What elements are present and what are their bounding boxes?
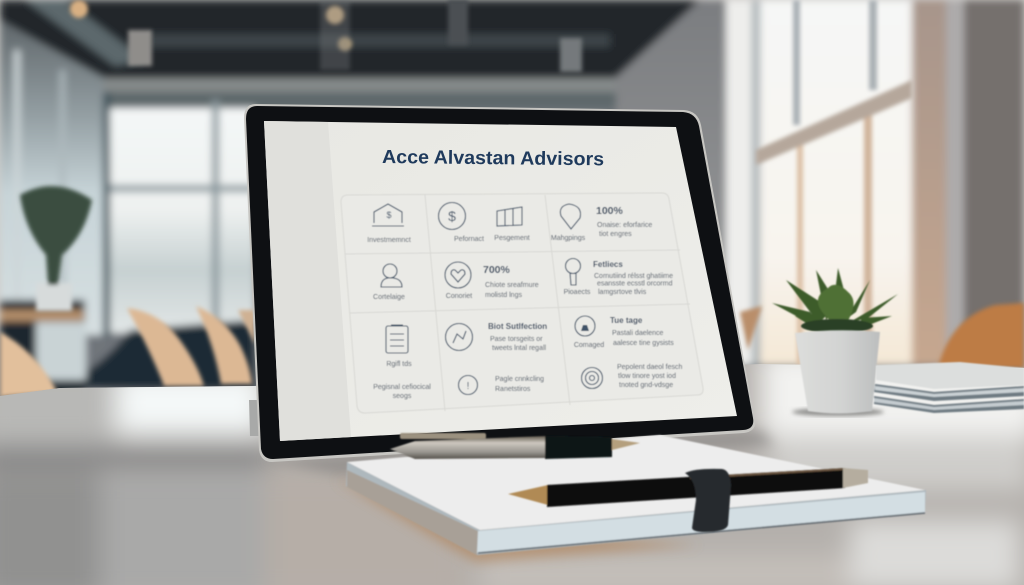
cell: satisfaction <box>446 322 547 352</box>
cell: right bills: Pegisnal cefiocical <box>373 384 431 391</box>
tablet shadow <box>262 430 775 475</box>
pot shadow <box>792 408 884 416</box>
cell: tue tags: Comaged <box>574 342 604 349</box>
tablet bezel <box>246 106 753 459</box>
left wall <box>0 20 104 335</box>
cell: 700% <box>445 262 539 300</box>
feature grid <box>341 193 703 413</box>
right wall <box>616 0 726 365</box>
cell: fetliecs: lamgsrtove tlvis <box>598 289 647 296</box>
cell: 100%: Mahgpings <box>551 235 586 242</box>
notepad warm shadow <box>335 478 700 562</box>
cell: payment <box>438 202 484 243</box>
centre window <box>110 108 255 333</box>
cell: engagement: Pesgement <box>494 235 530 242</box>
cell: fetliecs: Fetliecs <box>593 260 623 269</box>
cell: satisfaction: Biot Sutlfection <box>488 322 547 331</box>
cell: 700%: Conoriet <box>446 293 472 300</box>
heading: Acce Alvastan Advisors <box>382 147 604 170</box>
background: blurred office interior <box>0 0 1024 420</box>
tablet stand <box>249 400 262 436</box>
cell: investment: $ <box>386 210 392 220</box>
cell: right bills <box>373 325 431 400</box>
cell: fetliecs: Pioaects <box>564 289 591 296</box>
cell: 700%: molistd lngs <box>485 292 522 299</box>
cell: fetliecs: esansste ecsstl orcormd <box>597 280 673 288</box>
header band <box>104 78 616 92</box>
silver pen <box>390 433 640 459</box>
cell: investment: Investmemnct <box>367 237 411 244</box>
cell: engagement <box>494 207 530 242</box>
plant in white pot <box>772 268 898 416</box>
cell: notice <box>458 376 544 394</box>
cell: tue tags: aalesce tine gysists <box>613 340 674 347</box>
table lighting <box>0 350 1024 585</box>
cell: 700%: 700% <box>483 264 511 276</box>
ceiling <box>0 0 700 78</box>
left wall panels <box>14 50 20 335</box>
dark furniture <box>55 320 255 390</box>
table top <box>0 364 1024 585</box>
cell: notice: ! <box>467 381 469 392</box>
cell: 700%: Chiote sreafmure <box>485 282 539 289</box>
sidebar <box>264 121 351 441</box>
cell: 100% <box>551 204 652 242</box>
cell: target: tlow tinore yost iod <box>618 373 676 380</box>
cell: tue tags: Tue tage <box>610 316 643 325</box>
pot <box>795 330 880 414</box>
background chairs <box>0 303 1024 397</box>
cell: target: Pepolent daeol fesch <box>617 364 682 371</box>
cell: tue tags <box>574 316 674 349</box>
window mullions <box>756 0 912 365</box>
notepad on table <box>346 435 926 555</box>
tablet <box>244 104 755 462</box>
cell: right bills: seogs <box>393 393 412 400</box>
cell: satisfaction: tweets lntal regall <box>492 345 547 352</box>
cell: payment: $ <box>448 208 456 224</box>
ceiling duct <box>25 0 145 66</box>
cell: knowledge <box>373 264 405 301</box>
stacked notebooks right <box>874 362 1024 413</box>
cell: 100%: 100% <box>596 205 624 217</box>
cell: 100%: tiot engres <box>599 231 632 238</box>
cell: satisfaction: Pase torsgeits or <box>490 336 543 343</box>
screen <box>264 121 737 441</box>
cell: target: tnoted gnd-vdsge <box>619 382 673 389</box>
cell: investment <box>367 204 411 244</box>
tablet case edge <box>244 104 755 462</box>
cell: notice: Pagle cnnkcling <box>495 376 544 383</box>
background plant <box>20 186 92 311</box>
black pen with band <box>508 468 868 532</box>
leaves <box>772 268 898 333</box>
cell: target <box>582 364 682 389</box>
cell: tue tags: Pastali daelence <box>612 330 663 337</box>
cell: 100%: Onaise: eforfarice <box>597 222 652 229</box>
ceiling lights <box>70 0 582 72</box>
cell: fetliecs: Cornutiind rélsst ghatiime <box>594 273 673 280</box>
cell: right bills: Rgifl tds <box>386 361 412 368</box>
cell: payment: Pefornact <box>454 236 484 243</box>
far right wall <box>912 0 948 365</box>
cell: knowledge: Cortelaige <box>373 294 405 301</box>
right windows <box>760 0 913 365</box>
cell: fetliecs <box>564 258 673 296</box>
cell: notice: Ranetstiros <box>495 386 531 393</box>
